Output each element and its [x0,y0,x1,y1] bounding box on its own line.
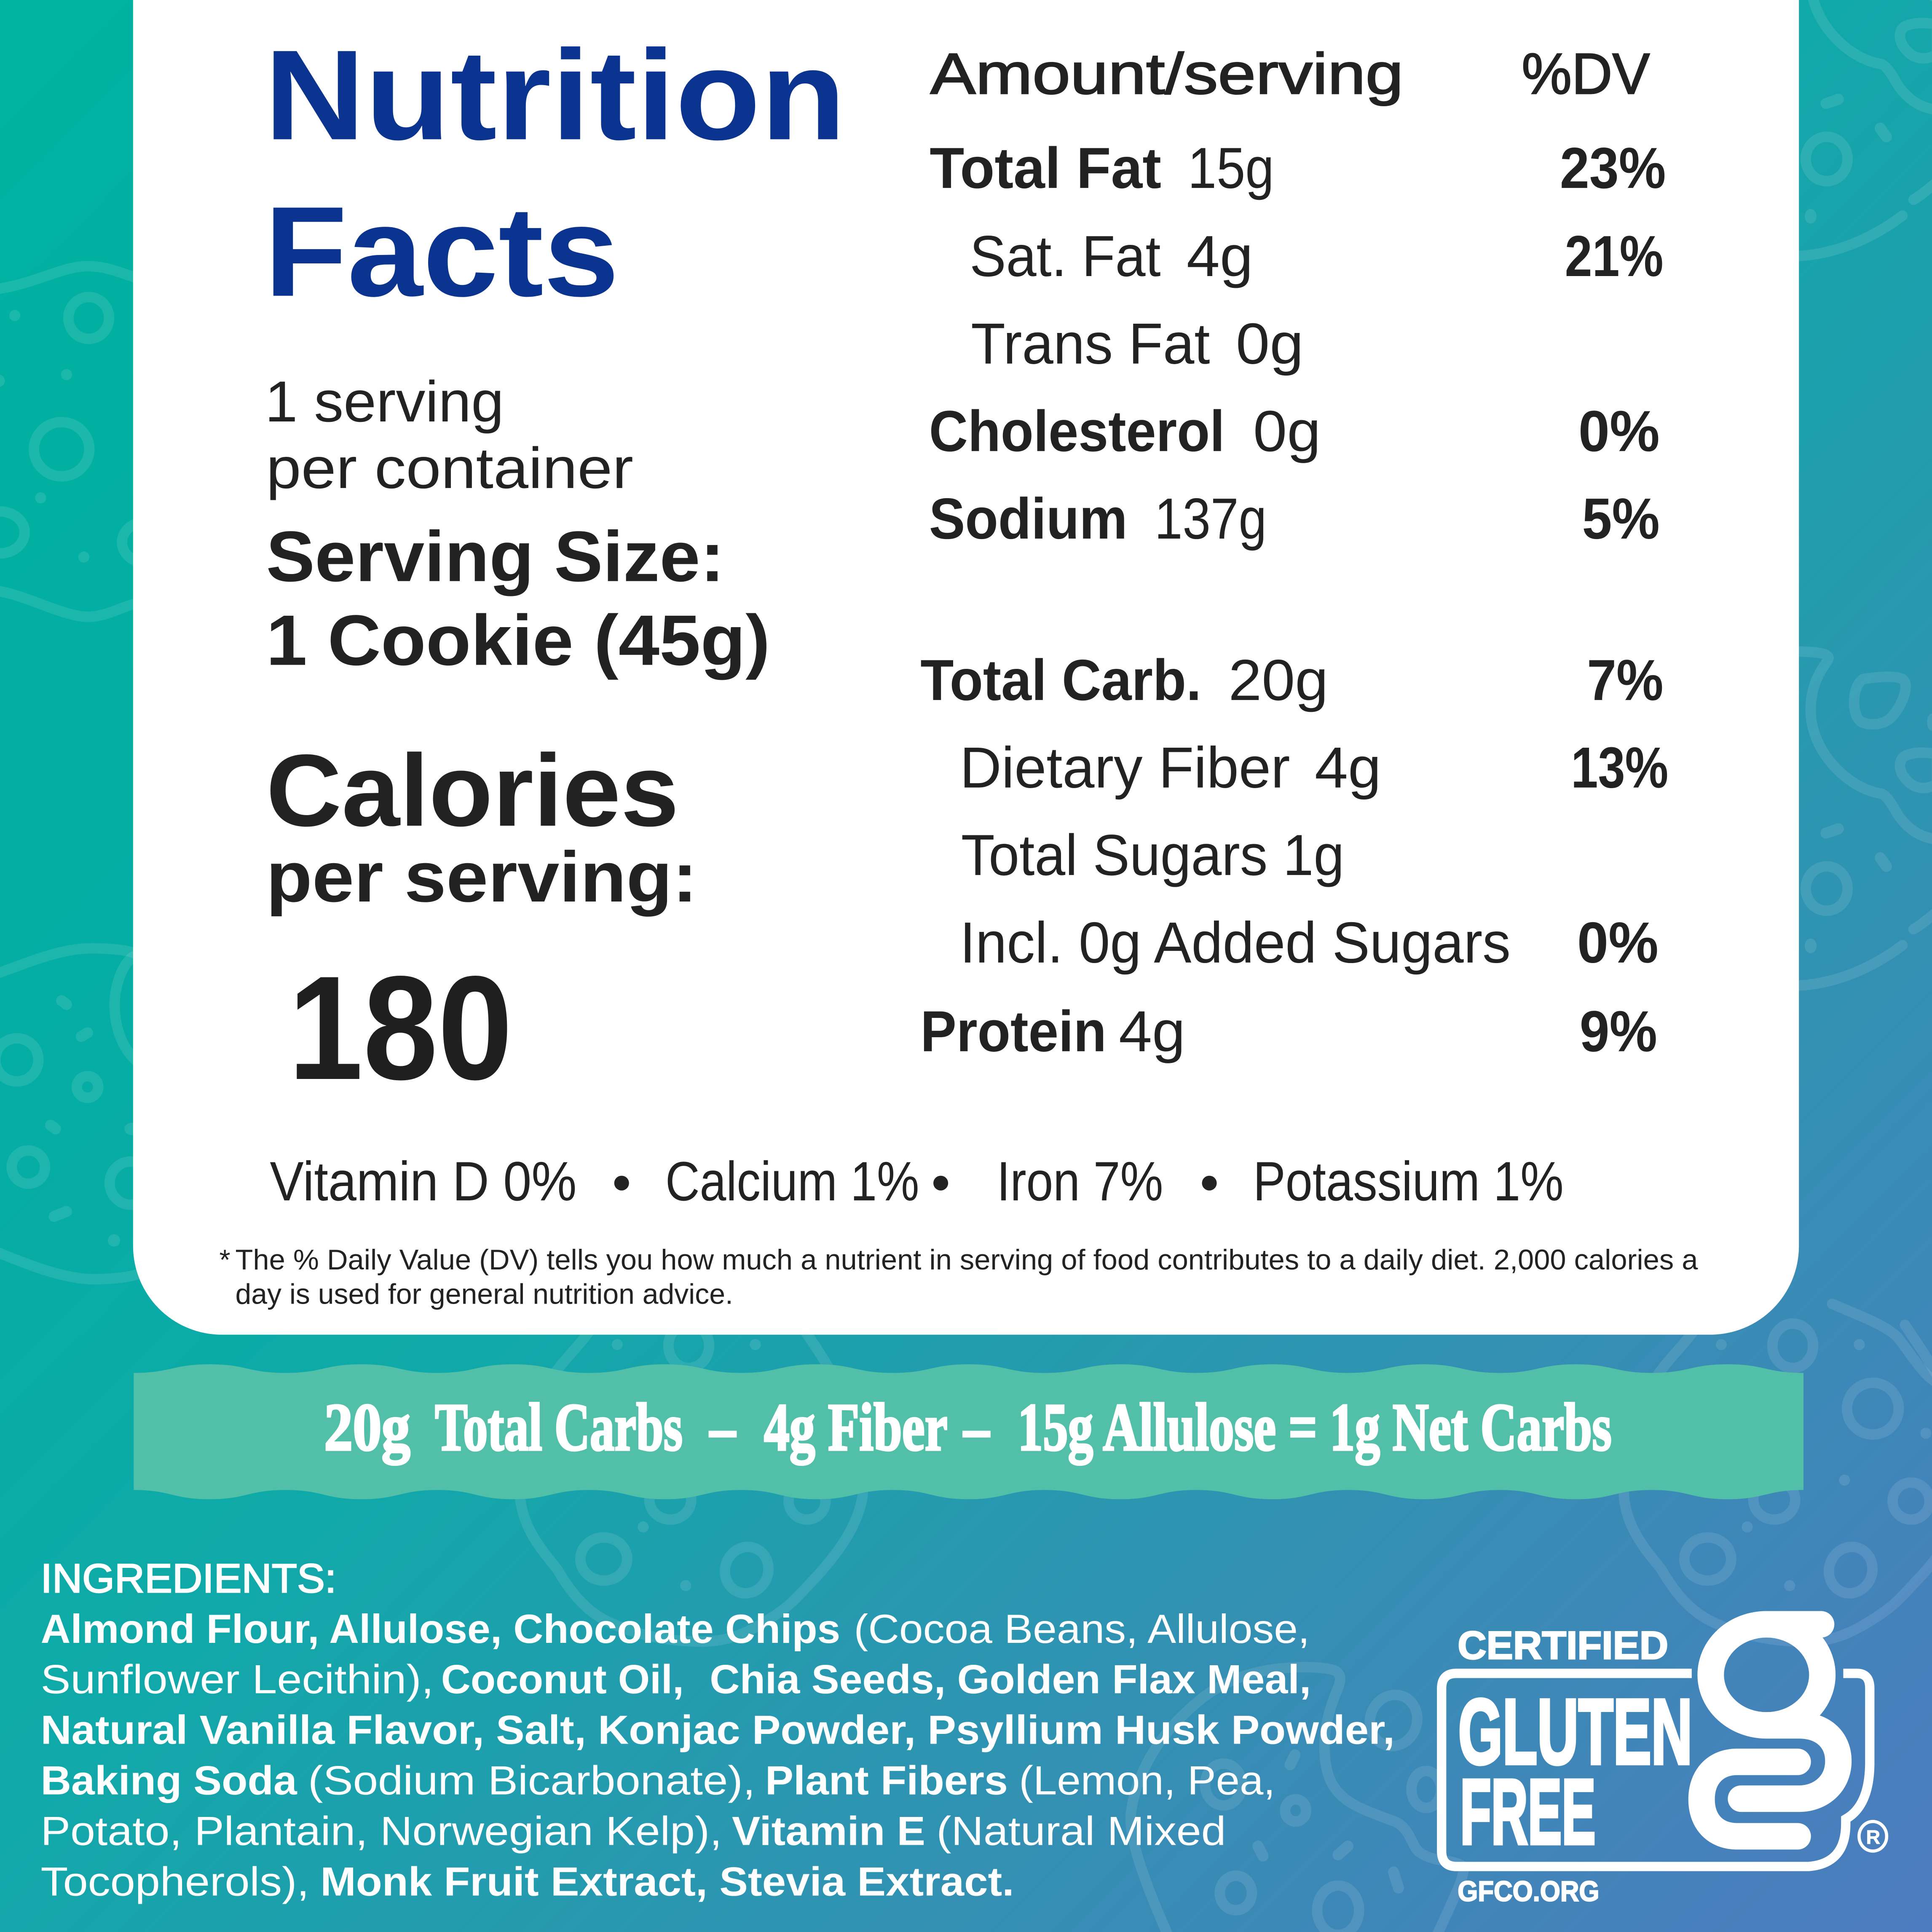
row: total fat: 15g [1188,136,1274,201]
row: added sugars: Incl. 0g Added Sugars [960,911,1511,975]
logo text: gluten free: FREE [1460,1760,1596,1863]
text: calories per serving: per serving: [266,837,697,917]
footnote: daily value: day is used for general nutrition advice. [236,1279,733,1310]
row: trans fat: 0g [1236,312,1304,376]
row: cholesterol: 0g [1253,399,1321,464]
row: total fat [930,136,1666,201]
row: protein: 9% [1580,999,1657,1064]
logo frame [1442,1673,1870,1867]
footnote: daily value [219,1244,1698,1310]
text: servings per container: 1 serving [265,370,504,434]
banner: net carbs equation: – [963,1390,990,1465]
footnote: daily value: * [219,1244,230,1276]
text block: ingredients: Vitamin E [732,1809,925,1854]
table header: amount per serving and daily value [930,42,1650,106]
text block: ingredients: Baking Soda [40,1758,297,1803]
row: sodium: 5% [1582,487,1660,551]
text: serving size: Serving Size: [266,516,724,596]
banner: net carbs equation: Total Carbs [435,1390,683,1465]
text block: ingredients: Natural Vanilla Flavor, Salt, Konjac Powder, Psyllium Husk Powder, [40,1708,1395,1753]
text: vitamins and minerals: Calcium 1% [665,1150,919,1212]
logo text: gluten free: GLUTEN [1458,1680,1692,1783]
banner: net carbs equation [134,1364,1803,1499]
heading: Nutrition Facts: Nutrition [264,24,846,166]
row: trans fat: Trans Fat [971,312,1210,376]
row: total carbohydrate: Total Carb. [920,648,1201,713]
table header: amount per serving and daily value: Amount/serving [930,42,1404,106]
row: sodium: 137g [1155,487,1267,551]
table header: amount per serving and daily value: %DV [1522,42,1650,106]
text block: ingredients: Monk Fruit Extract, Stevia Extract. [320,1859,1014,1904]
text block: ingredients: (Lemon, Pea, [1019,1758,1275,1803]
text: calories per serving [266,733,697,917]
text block: ingredients: Tocopherols), [40,1859,309,1904]
text: serving size: 1 Cookie (45g) [266,600,770,680]
logo text: website: GFCO.ORG [1458,1876,1599,1907]
banner: net carbs equation: 20g [324,1390,410,1465]
row: protein: Protein [920,999,1107,1064]
row: dietary fiber [960,736,1668,800]
logo text: gluten free [1458,1680,1692,1863]
text block: ingredients: (Cocoa Beans, Allulose, [854,1607,1310,1652]
text: calories per serving: Calories [266,733,679,848]
row: sodium [929,487,1660,551]
heading: Nutrition Facts: Facts [264,180,619,323]
text block: ingredients: Potato, Plantain, Norwegian Kelp), [40,1809,722,1854]
row: total carbohydrate [920,648,1664,713]
row: sodium: Sodium [929,487,1128,551]
row: saturated fat: 21% [1565,224,1664,289]
text block: ingredients: Coconut Oil, [441,1657,684,1702]
row: protein [920,999,1657,1064]
text block: ingredients [40,1556,1395,1904]
text block: ingredients: (Sodium Bicarbonate), [308,1758,755,1803]
row: saturated fat [970,224,1664,289]
panel: nutrition facts card [133,0,1799,1335]
text block: ingredients: INGREDIENTS: [40,1556,336,1601]
text block: ingredients: Chia Seeds, Golden Flax Meal, [710,1657,1311,1702]
row: cholesterol [929,399,1660,464]
row: dietary fiber: 4g [1315,736,1381,800]
text: serving size [266,516,770,680]
row: cholesterol: 0% [1578,399,1660,464]
text: vitamins and minerals: Vitamin D 0% [270,1150,576,1212]
text: servings per container: per container [266,436,633,501]
text block: ingredients: (Natural Mixed [936,1809,1226,1854]
logo text: certified: CERTIFIED [1458,1623,1668,1667]
logo icon: letter g [1702,1624,1838,1836]
text: servings per container [265,370,633,501]
text block: ingredients: Sunflower Lecithin), [40,1657,434,1702]
footnote: daily value: The % Daily Value (DV) tells you how much a nutrient in serving of food contributes to a daily diet. 2,000 calories a [236,1244,1698,1276]
row: total carbohydrate: 20g [1228,648,1328,713]
banner: net carbs equation: 4g Fiber [764,1390,948,1465]
number: 180 calories: 180 [288,945,512,1111]
row: total sugars: Total Sugars 1g [961,823,1344,888]
text: vitamins and minerals: Iron 7% [997,1150,1163,1212]
row: dietary fiber: Dietary Fiber [960,736,1290,800]
row: dietary fiber: 13% [1571,736,1668,800]
row: added sugars: 0% [1577,911,1659,975]
heading: Nutrition Facts [264,24,846,323]
text block: ingredients: Plant Fibers [765,1758,1008,1803]
banner: net carbs equation: – [709,1390,736,1465]
row: total fat: 23% [1560,136,1666,201]
row: saturated fat: Sat. Fat [970,224,1161,289]
banner: net carbs equation: 15g Allulose = 1g Net Carbs [1018,1390,1612,1465]
text block: ingredients: Almond Flour, Allulose, Chocolate Chips [40,1607,840,1652]
logo: certified gluten free [1442,1623,1886,1907]
text: vitamins and minerals: Potassium 1% [1253,1150,1564,1212]
text: vitamins and minerals [270,1150,1564,1212]
row: total carbohydrate: 7% [1587,648,1664,713]
row: saturated fat: 4g [1187,224,1253,289]
row: total fat: Total Fat [930,136,1161,201]
logo mark: registered [1859,1822,1886,1851]
logo mark: registered: R [1866,1826,1880,1848]
row: cholesterol: Cholesterol [929,399,1225,464]
row: protein: 4g [1119,999,1185,1064]
